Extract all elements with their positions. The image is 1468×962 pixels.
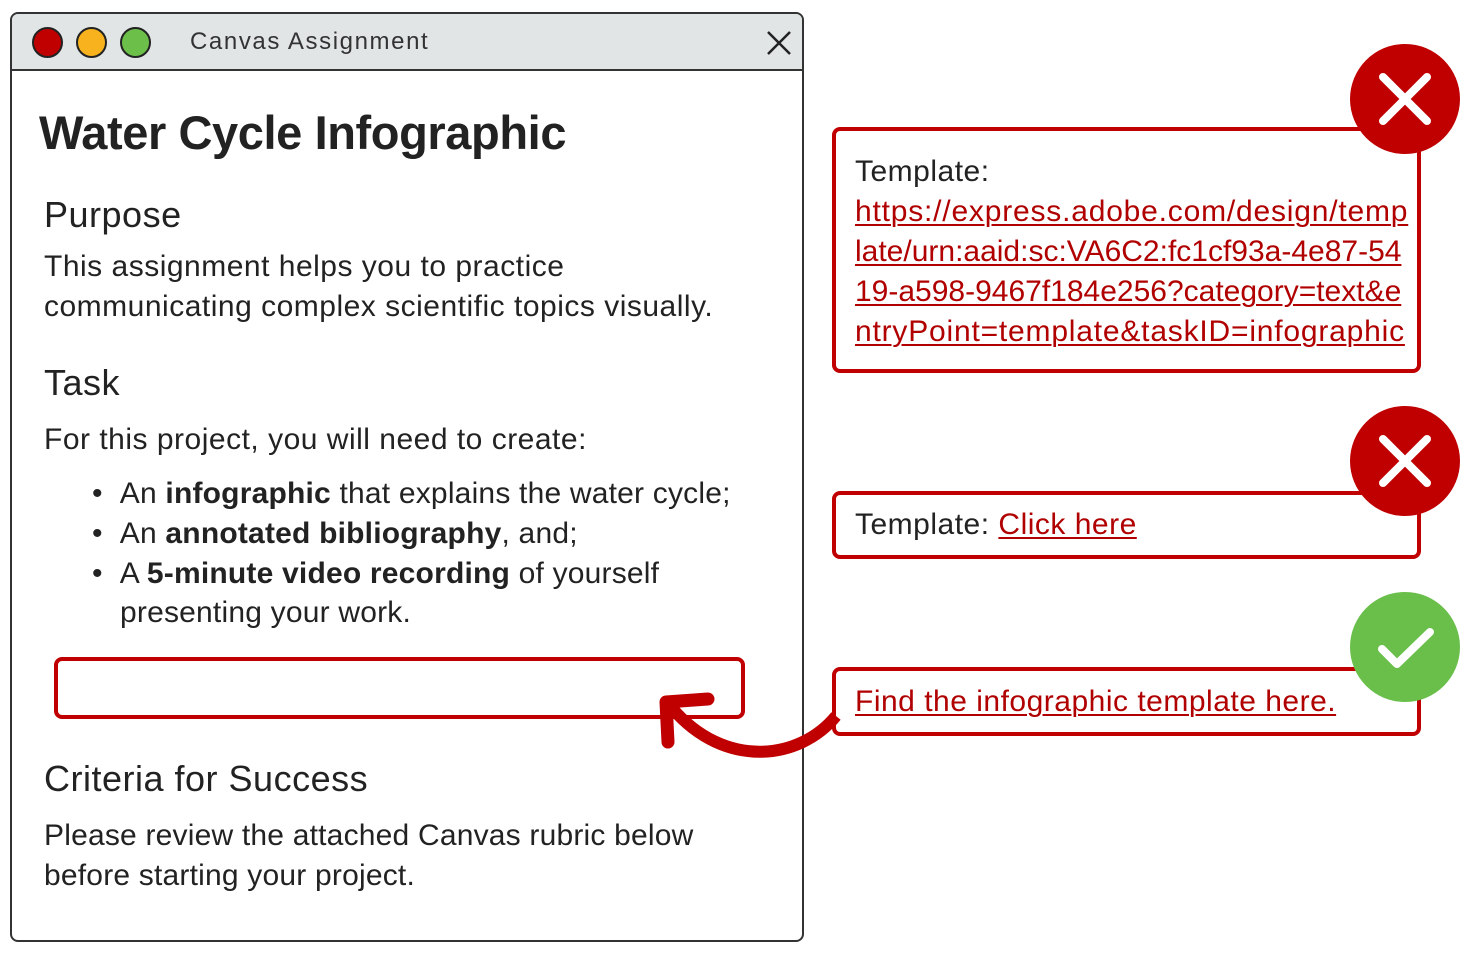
task intro: For this project, you will need to create: xyxy=(44,423,587,456)
callout box 2: click here xyxy=(832,491,1421,559)
task bullets xyxy=(92,477,731,629)
icon: green check xyxy=(1350,592,1460,702)
window title: Canvas Assignment xyxy=(190,28,429,55)
task bullets: presenting your work. xyxy=(120,596,411,629)
heading: Water Cycle Infographic xyxy=(39,106,566,159)
criteria text: Please review the attached Canvas rubric below xyxy=(44,819,694,852)
callout box 3: good link: Find the infographic template here. xyxy=(855,685,1336,718)
title bar xyxy=(12,14,802,71)
icon: red x 2 xyxy=(1350,406,1460,516)
icon: green dot xyxy=(120,27,151,58)
purpose text: communicating complex scientific topics visually. xyxy=(44,290,713,323)
task bullets: • A 5-minute video recording of yourself xyxy=(92,557,659,590)
callout box 1: long url: https://express.adobe.com/design/temp xyxy=(855,195,1408,228)
task heading: Task xyxy=(44,362,120,403)
task bullets: • An annotated bibliography, and; xyxy=(92,517,578,550)
icon: red dot xyxy=(32,27,63,58)
callout box 3: good link xyxy=(832,667,1421,736)
window panel xyxy=(10,12,804,942)
icon: yellow dot xyxy=(76,27,107,58)
purpose text: This assignment helps you to practice xyxy=(44,250,564,283)
criteria text xyxy=(44,819,694,892)
callout box 1: long url: Template: xyxy=(855,155,990,188)
criteria text: before starting your project. xyxy=(44,859,415,892)
callout box 1: long url: 19-a598-9467f184e256?category=text&e xyxy=(855,275,1401,308)
icon: close xyxy=(767,31,791,55)
purpose text xyxy=(44,250,713,323)
callout box 1: long url xyxy=(832,127,1421,373)
purpose heading: Purpose xyxy=(44,194,182,235)
empty placeholder box xyxy=(54,657,745,719)
callout box 1: long url: late/urn:aaid:sc:VA6C2:fc1cf93a-4e87-54 xyxy=(855,235,1401,268)
callout box 1: long url: ntryPoint=template&taskID=infographic xyxy=(855,315,1405,348)
task bullets: • An infographic that explains the water cycle; xyxy=(92,477,731,510)
criteria heading: Criteria for Success xyxy=(44,758,368,799)
callout box 2: click here: Template: Click here xyxy=(855,508,1137,541)
icon: red x 1 xyxy=(1350,44,1460,154)
